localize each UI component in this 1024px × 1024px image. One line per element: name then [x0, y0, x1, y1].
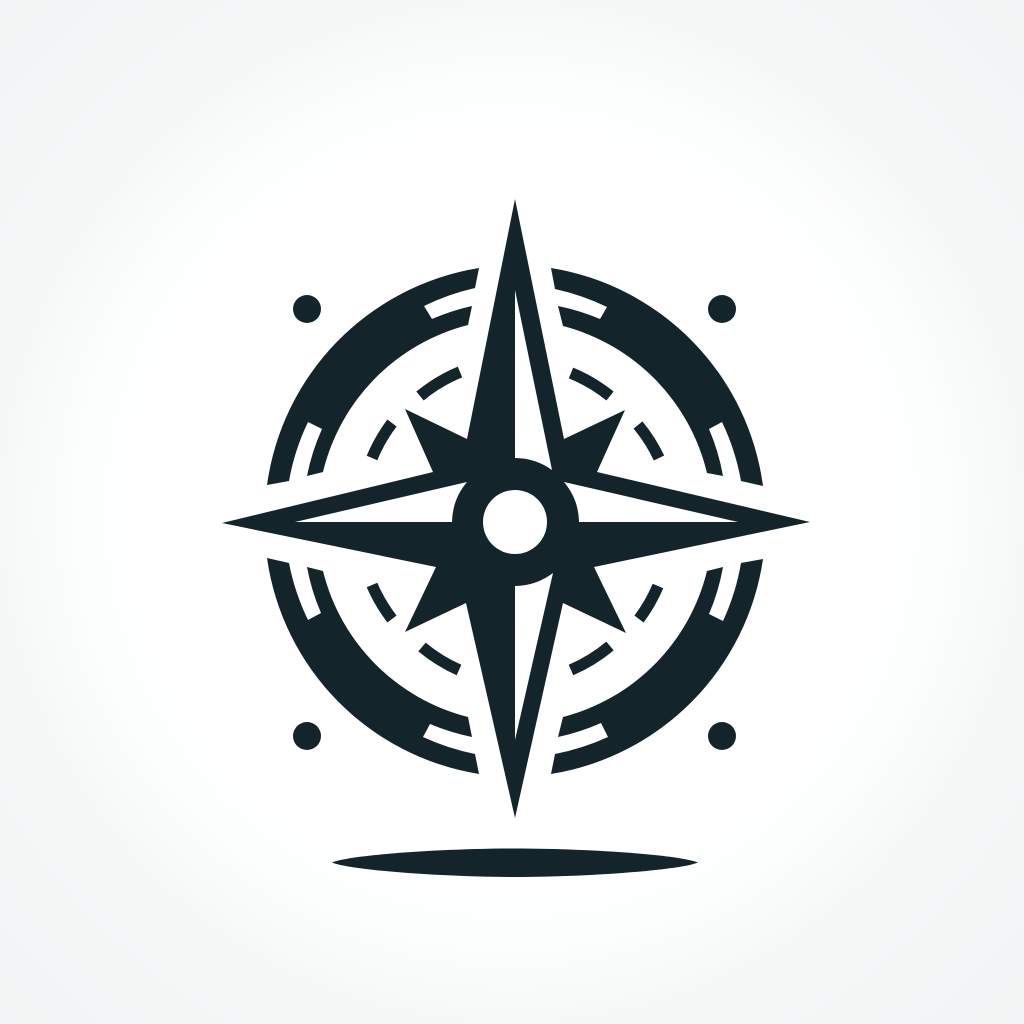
- center hole: [483, 490, 547, 554]
- ground shadow: [332, 848, 698, 877]
- ring segment: top right: [551, 268, 763, 486]
- ring segment: bottom left: [267, 558, 479, 774]
- corner dots: [293, 295, 736, 750]
- hub: [451, 458, 579, 586]
- east point highlight: [564, 482, 738, 522]
- west point highlight: [295, 482, 467, 522]
- compass star: [222, 199, 810, 818]
- inner dashed ring: [372, 372, 659, 670]
- outer ring: [267, 268, 763, 774]
- ring segment: bottom right: [551, 559, 763, 774]
- star body: [222, 199, 810, 818]
- north point highlight: [515, 290, 552, 470]
- ring segment: top left: [267, 268, 479, 485]
- south point highlight: [515, 573, 553, 740]
